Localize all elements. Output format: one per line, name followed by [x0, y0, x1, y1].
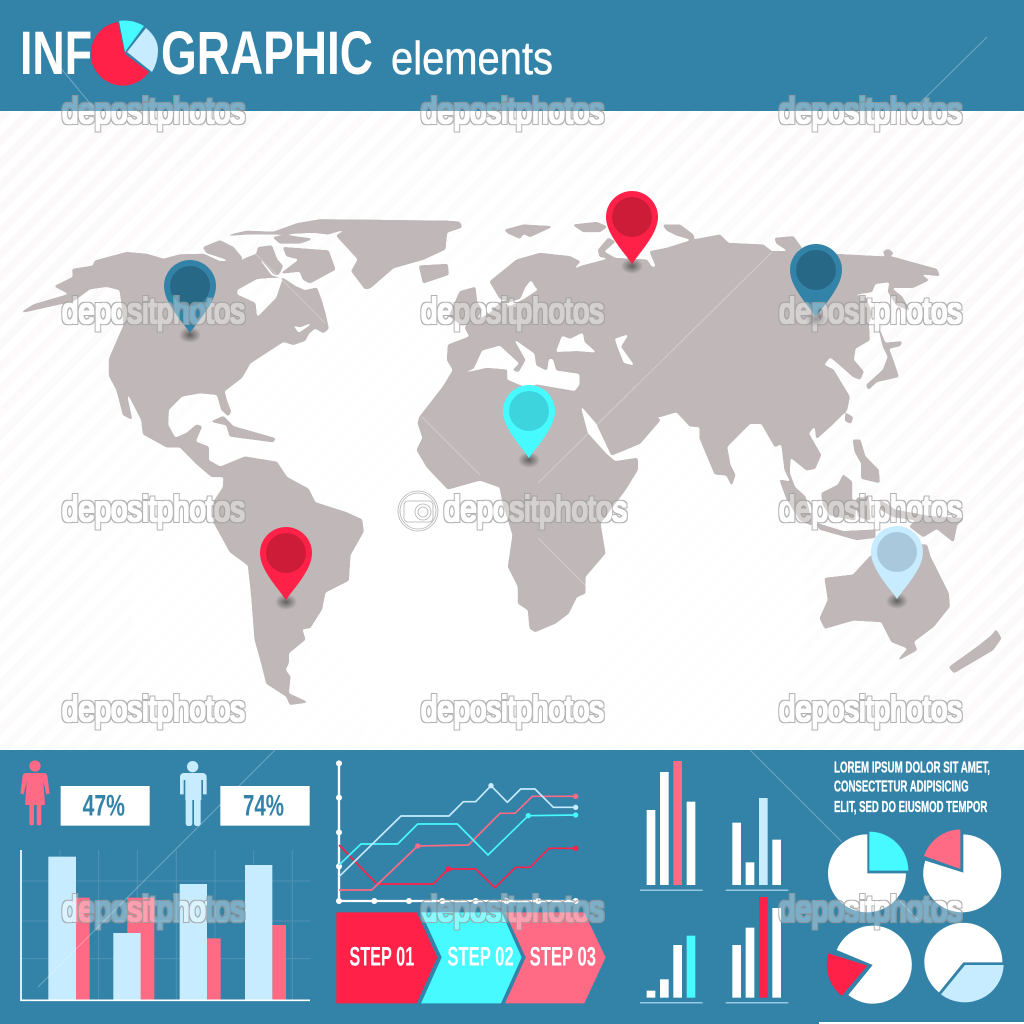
arrow: step 01	[336, 912, 437, 1003]
watermarks: depositphotos: depositphotos	[779, 488, 962, 529]
watermarks: depositphotos: depositphotos	[421, 90, 604, 131]
icon: woman	[20, 760, 50, 825]
small bar chart 4	[726, 897, 788, 1003]
arrow: step 03	[505, 912, 606, 1003]
watermarks: depositphotos: depositphotos	[62, 488, 245, 529]
watermarks: depositphotos: depositphotos	[779, 888, 962, 929]
stat box: 74%: 74%	[243, 789, 284, 822]
watermarks: depositphotos: depositphotos	[62, 290, 245, 331]
Eurasia, Africa and Oceania	[417, 222, 1001, 673]
map background: striped panel	[0, 111, 1024, 751]
title: INFOGRAPHIC elements	[20, 19, 553, 87]
stat box: 74%	[220, 786, 310, 826]
arrow: step 01: STEP 01	[349, 942, 414, 972]
arrow: step 02: STEP 02	[447, 942, 514, 972]
header band	[0, 0, 1024, 111]
map pin: North America, blue	[164, 260, 216, 343]
small bar chart 1	[640, 761, 703, 891]
small bar chart 3	[640, 936, 703, 1003]
watermarks: depositphotos: depositphotos	[62, 688, 245, 729]
title: INFOGRAPHIC elements: elements	[391, 32, 553, 84]
map pin: Africa, cyan	[503, 385, 555, 468]
panel: small bar charts, text and pies	[640, 759, 1004, 1004]
title: INFOGRAPHIC elements: GRAPHIC	[161, 19, 373, 87]
pie chart: red slice	[827, 926, 912, 1004]
icon: man	[180, 761, 207, 826]
panel: line chart and steps	[336, 760, 606, 1003]
watermarks: depositphotos: depositphotos	[421, 888, 604, 929]
title: INFOGRAPHIC elements: INF	[20, 19, 92, 87]
watermarks: depositphotos: depositphotos	[421, 290, 604, 331]
pie chart: light blue slice	[924, 923, 1004, 1002]
world map	[22, 220, 1001, 704]
panel: gender statistics and grouped bar chart	[20, 760, 310, 1000]
map pin: Australia, light blue	[871, 526, 923, 609]
watermarks: depositphotos: depositphotos	[421, 688, 604, 729]
bar chart	[21, 850, 310, 1000]
stat box: 47%: 47%	[83, 789, 125, 822]
watermarks: depositphotos: depositphotos	[779, 90, 962, 131]
map pin: Russia, red	[606, 191, 658, 274]
arrow: step 03: STEP 03	[530, 942, 596, 972]
arrow: step 02	[421, 912, 522, 1003]
watermarks: depositphotos: depositphotos	[444, 488, 627, 529]
line chart	[336, 760, 579, 904]
small bar chart 2	[726, 798, 788, 891]
pie chart: cyan slice	[828, 832, 908, 912]
pie chart: pink slice	[923, 829, 1001, 912]
watermarks: depositphotos	[62, 90, 962, 929]
watermarks: depositphotos: depositphotos	[779, 290, 962, 331]
text block: lorem ipsum	[834, 759, 990, 816]
icon: watermark camera logo	[398, 491, 438, 531]
bottom edge strip	[819, 1022, 1024, 1024]
stat box: 47%	[61, 786, 150, 826]
map pin: East Asia, blue	[790, 244, 842, 327]
icon: title pie chart as letter O	[91, 21, 158, 86]
watermarks: depositphotos: depositphotos	[779, 688, 962, 729]
Americas and Greenland	[22, 220, 462, 704]
watermarks: depositphotos: depositphotos	[62, 90, 245, 131]
map pin: South America, red	[260, 527, 312, 610]
watermarks: depositphotos: depositphotos	[62, 888, 245, 929]
bottom panel	[0, 750, 1024, 1024]
